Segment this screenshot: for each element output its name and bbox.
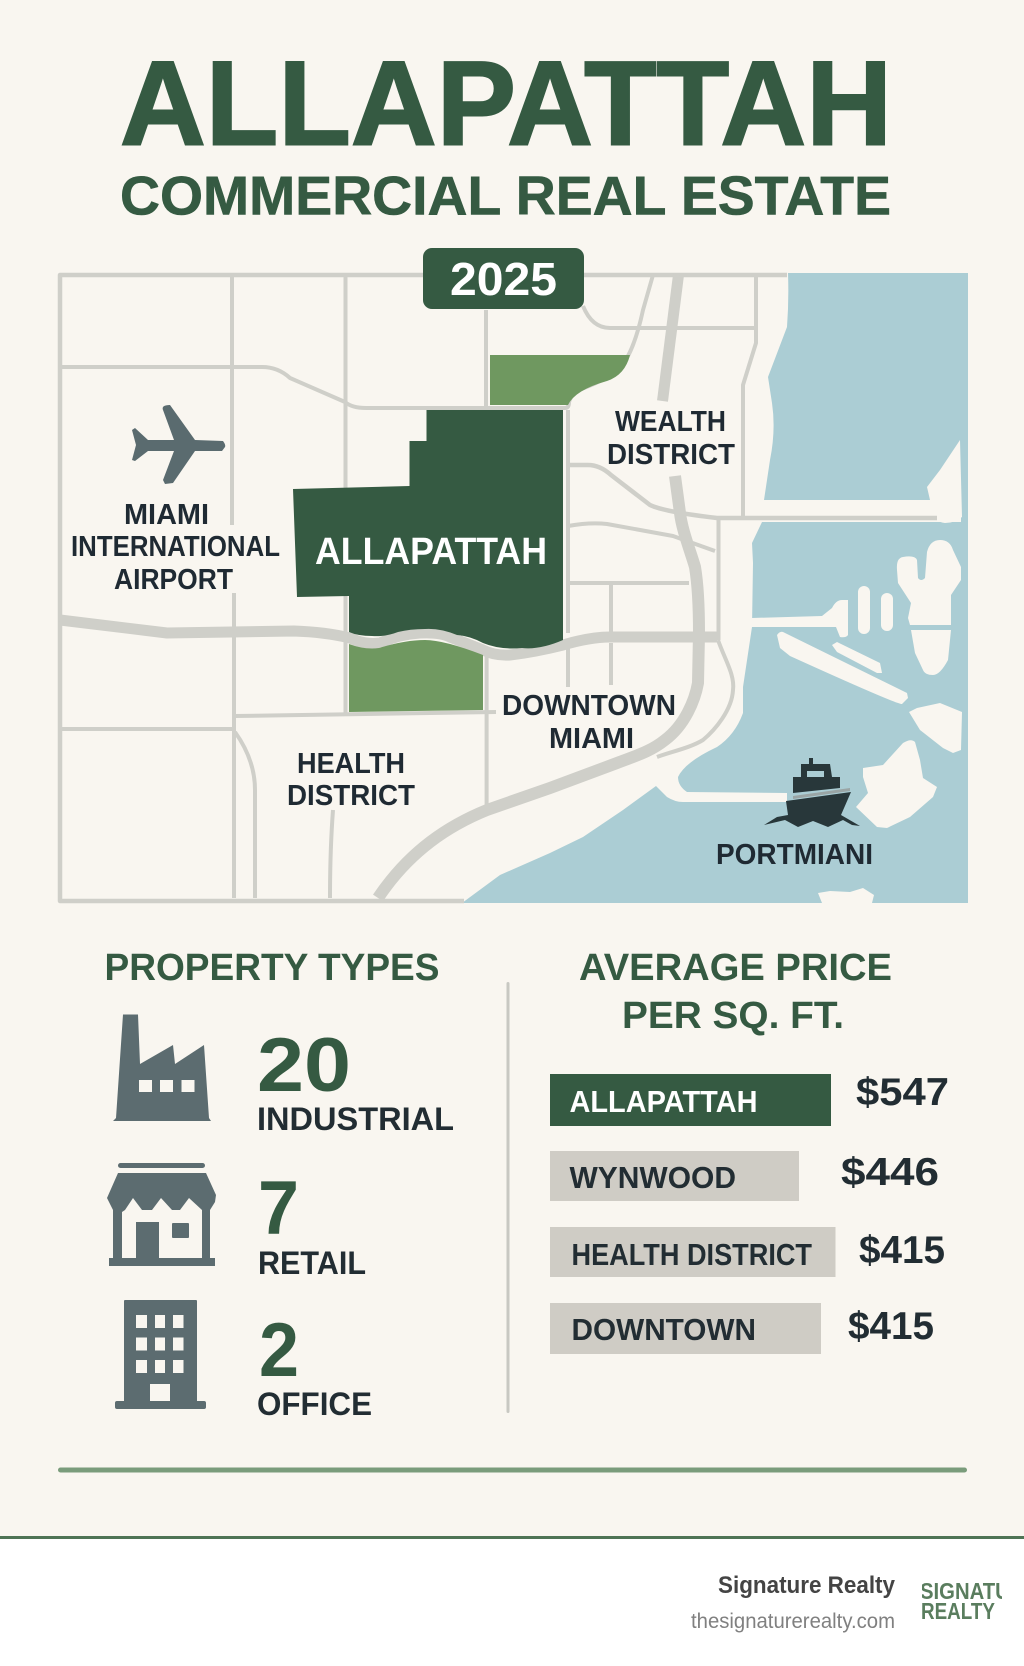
bar: allapattah <box>550 1071 949 1126</box>
bar: allapattah: ALLAPATTAH <box>570 1084 758 1119</box>
footer brand name: Signature Realty <box>718 1572 896 1599</box>
district label: ALLAPATTAH <box>315 531 547 573</box>
label: airport: MIAMI <box>124 499 209 531</box>
water <box>462 273 968 903</box>
title: ALLAPATTAH <box>120 36 892 170</box>
bar: wynwood: $446 <box>841 1151 939 1194</box>
stat: industrial: 20 <box>257 1023 351 1108</box>
label: downtown miami: DOWNTOWN <box>502 690 676 722</box>
bar: allapattah: $547 <box>856 1071 949 1114</box>
label: health district: HEALTH <box>297 748 405 780</box>
stat: retail <box>258 1166 366 1281</box>
label: airport: AIRPORT <box>114 564 233 596</box>
allapattah district <box>293 410 563 648</box>
stat: office: 2 <box>259 1308 299 1393</box>
panel: average price <box>550 947 949 1354</box>
heading: average price: AVERAGE PRICE <box>579 947 892 989</box>
label: wealth district: DISTRICT <box>607 439 735 471</box>
bar: health district: HEALTH DISTRICT <box>572 1237 812 1272</box>
label: airport: INTERNATIONAL <box>71 531 280 563</box>
heading: average price: PER SQ. FT. <box>622 995 844 1037</box>
stat: office: OFFICE <box>257 1386 372 1422</box>
label: airport <box>71 499 280 596</box>
label: health district <box>287 748 415 812</box>
bar: downtown: $415 <box>848 1305 934 1348</box>
bar: wynwood: WYNWOOD <box>570 1160 736 1195</box>
islands <box>752 440 962 903</box>
year badge <box>423 248 584 309</box>
label: wealth district: WEALTH <box>615 406 726 438</box>
stat: office <box>257 1308 372 1422</box>
highlighted parcels <box>349 355 630 712</box>
label: downtown miami <box>502 690 676 755</box>
footer url: thesignaturerealty.com <box>691 1610 895 1633</box>
heading: average price <box>579 947 892 1037</box>
stat: industrial: INDUSTRIAL <box>257 1101 454 1137</box>
label: health district: DISTRICT <box>287 780 415 812</box>
bar: health district <box>550 1227 945 1277</box>
bar: wynwood <box>550 1151 939 1201</box>
bar: downtown: DOWNTOWN <box>572 1312 756 1347</box>
icon: ship <box>764 758 860 827</box>
icon: store <box>107 1163 216 1266</box>
footer <box>0 1536 1024 1666</box>
icon: factory <box>113 1014 211 1121</box>
footer logo: REALTY <box>921 1598 995 1624</box>
panel: property types <box>104 947 454 1422</box>
label: portmiami: PORTMIANI <box>716 839 873 871</box>
stat: retail: RETAIL <box>258 1245 366 1281</box>
subtitle: COMMERCIAL REAL ESTATE <box>120 164 891 226</box>
bar: downtown <box>550 1303 934 1354</box>
icon: plane <box>132 405 225 484</box>
year badge: 2025 <box>450 253 557 305</box>
stat: industrial <box>257 1023 454 1137</box>
map panel <box>59 248 968 903</box>
stat: retail: 7 <box>258 1166 299 1251</box>
icon: office <box>115 1300 206 1409</box>
label: wealth district <box>607 406 735 471</box>
bar: health district: $415 <box>859 1229 945 1272</box>
label: downtown miami: MIAMI <box>549 723 634 755</box>
footer logo <box>922 1583 1002 1619</box>
roads <box>59 273 937 901</box>
heading: property types: PROPERTY TYPES <box>104 947 440 989</box>
